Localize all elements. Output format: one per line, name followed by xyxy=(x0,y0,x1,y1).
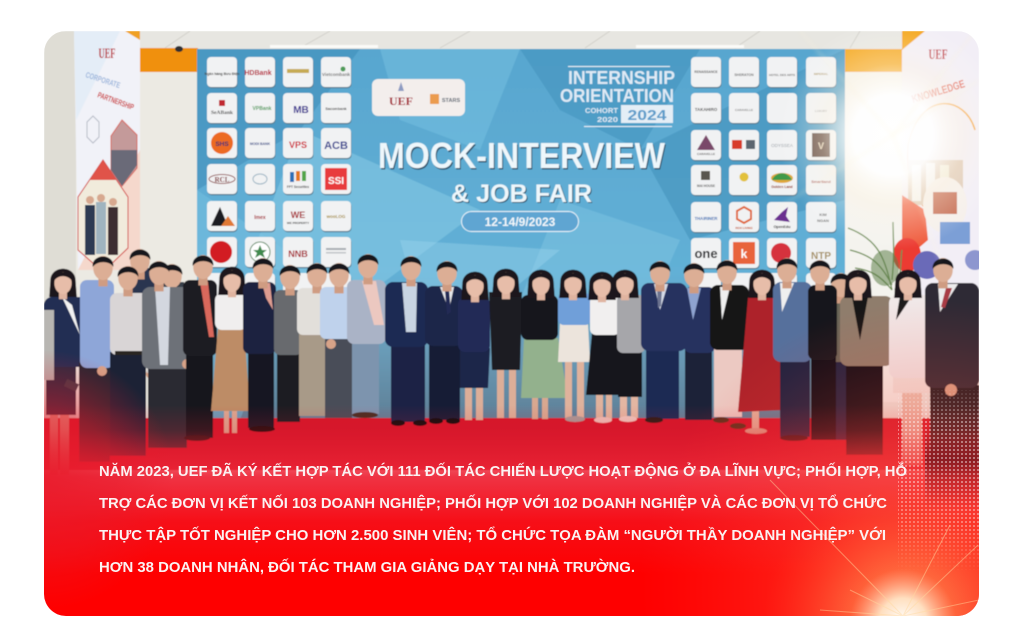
person 2: man blue shirt xyxy=(79,256,114,462)
person 23: woman red dress xyxy=(738,270,785,434)
person 25: man black outfit xyxy=(808,260,837,440)
person 4: man grey blazer xyxy=(141,260,188,448)
caption text: HƠN 38 DOANH NHÂN, ĐỐI TÁC THAM GIA GIẢNG DẠY TẠI NHÀ TRƯỜNG. xyxy=(99,558,635,576)
logo wall: left partners: Vietcombank xyxy=(322,72,350,77)
person 12: man navy suit xyxy=(385,256,428,426)
lens flare on banner xyxy=(775,31,979,271)
logo wall: right partners: IMPERIAL xyxy=(814,72,828,76)
backdrop title: internship orientation: 2024 xyxy=(628,107,667,124)
plant xyxy=(848,222,902,290)
person 19: woman grey blazer xyxy=(611,270,645,422)
backdrop title: internship orientation: 2020 xyxy=(597,115,618,124)
backdrop main title xyxy=(379,142,666,204)
person 17: woman blue polo xyxy=(558,270,591,422)
left standee banner: CORPORATE xyxy=(84,70,122,90)
logo wall: right partners: Smartland xyxy=(811,179,831,184)
logo wall: left partners: SHS xyxy=(215,141,229,148)
person 14: woman navy suit xyxy=(458,272,490,420)
person 18: woman white blouse black skirt xyxy=(586,272,620,423)
backdrop main title: & JOB FAIR xyxy=(451,180,592,208)
logo wall: left partners: SeABank xyxy=(211,110,234,116)
right standee banner xyxy=(893,31,985,295)
person 11: man light grey blazer xyxy=(347,254,386,418)
logo wall: left partners: SSI xyxy=(328,176,344,187)
logo wall: left partners: Imex xyxy=(254,215,266,221)
caption text: THỰC TẬP TỐT NGHIỆP CHO HƠN 2.500 SINH VIÊN; TỔ CHỨC TỌA ĐÀM “NGƯỜI THẦY DOANH NGHIỆP” VỚI xyxy=(99,526,886,544)
logo wall: right partners: TAKAHIRO xyxy=(695,107,718,112)
logo wall: right partners: KIM xyxy=(819,212,827,217)
backdrop UEF logo box: STARS xyxy=(442,98,460,104)
backdrop date pill: 12-14/9/2023 xyxy=(485,215,556,229)
person 16: woman black top floral skirt xyxy=(521,270,568,419)
right standee banner: UEF xyxy=(928,47,948,63)
person 15: woman black dress xyxy=(489,269,522,418)
person 9: man white shirt khaki pants xyxy=(297,263,327,416)
right standee banner: KNOWLEDGE xyxy=(910,78,966,106)
logo wall: right partners: CARAVELLE xyxy=(735,108,753,112)
person 1: woman navy blazer xyxy=(44,268,81,469)
logo wall: left partners: VPBank xyxy=(253,106,272,112)
logo wall: right partners: MAI HOUSE xyxy=(697,184,715,188)
person 26: woman tan blazer xyxy=(840,270,893,455)
logo wall: left partners: WE PROPERTY xyxy=(287,221,309,225)
person 10: man light blue shirt xyxy=(320,263,353,418)
logo wall: right partners xyxy=(691,57,836,304)
logo wall: right partners: NGAN xyxy=(817,218,829,223)
backdrop main title: MOCK-INTERVIEW xyxy=(379,136,666,178)
logo wall: left partners: VPS xyxy=(289,140,307,150)
halftone dots xyxy=(898,390,979,570)
group of people xyxy=(44,249,979,500)
person 21: man navy suit blue tie xyxy=(684,263,715,420)
logo wall: right partners: RENAISSANCE xyxy=(694,70,718,74)
backdrop wall xyxy=(197,49,845,421)
logo wall: right partners: k xyxy=(741,247,748,261)
backdrop main title: MOCK-INTERVIEW xyxy=(378,135,665,176)
logo wall: left partners: ACB xyxy=(324,140,348,152)
logo wall: right partners: ROX LIVING xyxy=(735,226,753,230)
logo wall: right partners: LUXURY xyxy=(815,109,827,113)
person 24: man blue blazer xyxy=(773,258,812,441)
left standee banner xyxy=(74,31,140,272)
red gradient overlay xyxy=(44,300,979,616)
logo wall: left partners: WE xyxy=(291,210,305,220)
logo wall: left partners: RCL xyxy=(215,176,230,184)
people standing in the back row xyxy=(125,249,854,440)
logo wall: right partners: ODYSSEA xyxy=(771,143,793,148)
red carpet xyxy=(44,418,979,470)
bottom starburst xyxy=(763,480,979,616)
logo wall: left partners: HDBank xyxy=(244,70,272,77)
backdrop title: internship orientation: ORIENTATION xyxy=(560,86,674,106)
logo wall: left partners: NNB xyxy=(288,249,308,259)
left standee banner: PARTNERSHIP xyxy=(96,90,136,112)
person 5: man black suit red tie xyxy=(183,255,217,441)
logo wall: right partners: SHERATON xyxy=(734,73,754,77)
logo wall: left partners: FPT Securities xyxy=(287,185,309,189)
room background xyxy=(44,31,979,431)
logo wall: right partners: one xyxy=(694,246,718,261)
logo wall: left partners: Sacombank xyxy=(325,107,348,111)
logo wall: left partners xyxy=(205,57,352,304)
person 8: man grey blazer dark pants xyxy=(274,265,302,422)
person 27: woman white blazer xyxy=(889,270,931,465)
logo wall: left partners: wooLOG xyxy=(326,214,346,219)
person 13: man navy suit dark tie xyxy=(425,261,463,424)
backdrop title: internship orientation: INTERNSHIP xyxy=(568,68,675,88)
logo wall: left partners: MB xyxy=(293,105,309,116)
person 20: man navy suit xyxy=(641,261,687,423)
logo wall: left partners: Ngân hàng Bưu Điện xyxy=(205,72,239,76)
person 6: woman tan skirt xyxy=(211,267,250,433)
backdrop title: internship orientation: COHORT xyxy=(585,106,618,115)
person 3: man white shirt xyxy=(109,266,149,456)
person 28: man dark suit xyxy=(925,258,979,500)
logo wall: right partners: OpenEdu xyxy=(774,225,791,229)
backdrop date pill xyxy=(462,212,578,232)
logo wall: left partners: MODI BANK xyxy=(250,142,271,146)
logo wall: right partners: NTP xyxy=(811,251,831,262)
logo wall: right partners: V xyxy=(818,141,824,151)
person 22: man black jacket pink pants xyxy=(710,260,749,429)
logo wall: right partners: CARAVELLE xyxy=(697,152,715,156)
backdrop UEF logo box xyxy=(372,79,465,116)
backdrop UEF logo box: UEF xyxy=(389,94,413,108)
caption text xyxy=(99,462,907,576)
left standee banner: UEF xyxy=(98,46,116,62)
backdrop main title: & JOB FAIR xyxy=(452,181,593,209)
logo wall: right partners: HOTEL DES ARTS xyxy=(769,73,795,77)
caption text: TRỢ CÁC ĐƠN VỊ KẾT NỐI 103 DOANH NGHIỆP; PHỐI HỢP VỚI 102 DOANH NGHIỆP VÀ CÁC ĐƠN VỊ TỔ CHỨC xyxy=(99,494,887,512)
backdrop title: internship orientation xyxy=(560,66,675,127)
caption text: NĂM 2023, UEF ĐÃ KÝ KẾT HỢP TÁC VỚI 111 ĐỐI TÁC CHIẾN LƯỢC HOẠT ĐỘNG Ở ĐA LĨNH VỰC; PHỐI HỢP, HỖ xyxy=(99,462,907,480)
person 7: man navy suit xyxy=(243,258,276,432)
logo wall: right partners: THAIRINER xyxy=(695,216,717,221)
logo wall: right partners: Golden Land xyxy=(771,185,793,189)
